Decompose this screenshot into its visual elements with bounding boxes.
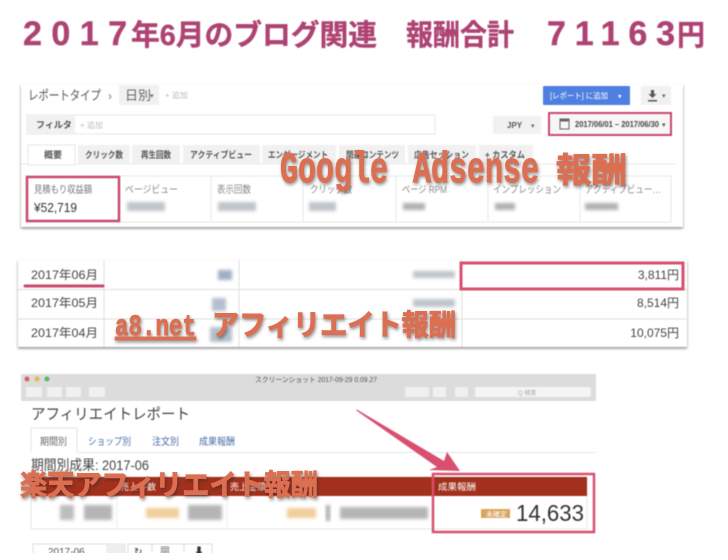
June underline [25,284,103,288]
filter input: + 追加 [80,120,103,130]
bottom controls: ⬇ [194,546,204,558]
window toolbar [21,374,596,401]
white fade at page bottom [0,553,728,560]
results table: 14,633 [516,500,584,526]
blue add-to-report button [543,86,630,105]
metric cards: 表示回数 [217,183,251,196]
title: 円 [677,20,705,52]
results table: 売上金額 [230,481,266,492]
filter input [27,115,435,134]
table background [18,260,687,347]
title: 2017 [23,15,127,53]
title: 年6月のブログ関連 [131,18,377,52]
tabs: + カスタム [485,149,525,160]
download button: ▾ [662,93,666,100]
window toolbar: Q 検索 [518,389,536,397]
row: May 2017 [31,296,679,311]
estimated earnings highlighted: 見積もり収益額 [34,183,92,196]
arrow [356,409,460,471]
report type selector: ▾ [150,93,154,100]
title [23,15,705,53]
overlay label: a8.net: a8.net [115,311,196,345]
report type selector: › [108,89,112,103]
metric cards: ページ RPM [402,185,447,196]
row: April 2017 [31,326,679,342]
overlay label: a8.net: アフィリエイト報酬 [212,309,456,342]
row: June 2017: 2017年06月 [31,268,98,282]
blue add-to-report button: [レポート] に追加 [550,90,608,100]
JPY selector: ▾ [531,123,535,130]
title: 報酬合計 [406,19,514,52]
period subheading: 期間別成果: 2017-06 [31,457,149,473]
results table: 成果報酬 [438,481,476,492]
filter input: フィルタ [36,119,72,130]
report type selector: + 追加 [165,90,188,100]
June earnings highlighted [461,263,683,289]
date range highlighted: 2017/06/01 – 2017/06/30 [575,120,660,129]
report type selector [28,85,188,105]
download button [641,86,671,105]
metric cards: クリック数 [310,183,352,196]
tabs: エンゲージメント [268,149,328,160]
panel: Rakuten affiliate report [21,374,596,560]
metric cards: アクティブビュー… [585,183,661,196]
window toolbar: スクリーンショット 2017-09-29 0.09.27 [255,376,377,384]
row: April 2017: 10,075円 [630,326,679,340]
bottom controls: 2017-06 [48,547,85,558]
report heading: アフィリエイトレポート [31,406,190,423]
bottom controls [33,544,212,560]
row: May 2017: 2017年05月 [31,296,98,310]
tabs: 概要 [44,149,62,160]
row: May 2017: 8,514円 [637,296,679,310]
nav tabs [31,428,596,452]
date range highlighted: ▾ [662,122,666,129]
overlay label: Google Adsense [280,146,627,196]
overlay label: a8.net [115,309,456,345]
panel: a8.net table [18,260,687,347]
tabs: 再生回数 [141,149,171,160]
tabs [21,145,675,165]
table grid [18,260,687,347]
nav tabs: 成果報酬 [199,436,235,448]
metric cards: ページビュー [125,184,178,196]
bottom controls: ▦ [160,546,170,558]
estimated earnings highlighted: ¥52,719 [33,200,77,215]
panel background [21,84,683,227]
tabs: クリック数 [85,149,123,160]
overlay label: Rakuten affiliate: 楽天アフィリエイト報酬 [20,469,318,502]
earnings highlighted [433,474,594,532]
bottom controls: ↻ [134,547,142,558]
date range highlighted [549,113,671,135]
nav tabs: 期間別 [40,436,67,448]
report type selector: 日別 [125,88,151,103]
estimated earnings highlighted [27,177,119,221]
row: April 2017: 2017年04月 [31,326,98,340]
JPY selector: JPY [507,121,523,130]
results table [31,477,587,529]
report type selector: レポートタイプ [28,88,101,103]
blue add-to-report button: ▾ [618,94,622,100]
overlay label: Google Adsense: Adsense [413,146,539,196]
metric cards: インプレッション [493,184,561,196]
nav tabs: ショップ別 [88,436,131,448]
results table: 売上件数 [120,481,156,492]
tabs: 広告セッション [414,149,469,160]
title: 71163 [547,15,675,53]
row: June 2017: 3,811円 [638,268,679,282]
tabs: 関連コンテンツ [346,149,399,160]
nav tabs: 注文別 [152,435,179,448]
metric cards [27,176,671,222]
tabs: アクティブビュー [190,149,252,160]
results table: 未確定 [486,510,507,518]
overlay label: Google Adsense: 報酬 [556,152,627,190]
panel: Google Adsense report [21,84,683,227]
row: June 2017 [31,268,679,282]
overlay label: Google Adsense: Google [280,146,388,196]
JPY selector [493,116,541,134]
